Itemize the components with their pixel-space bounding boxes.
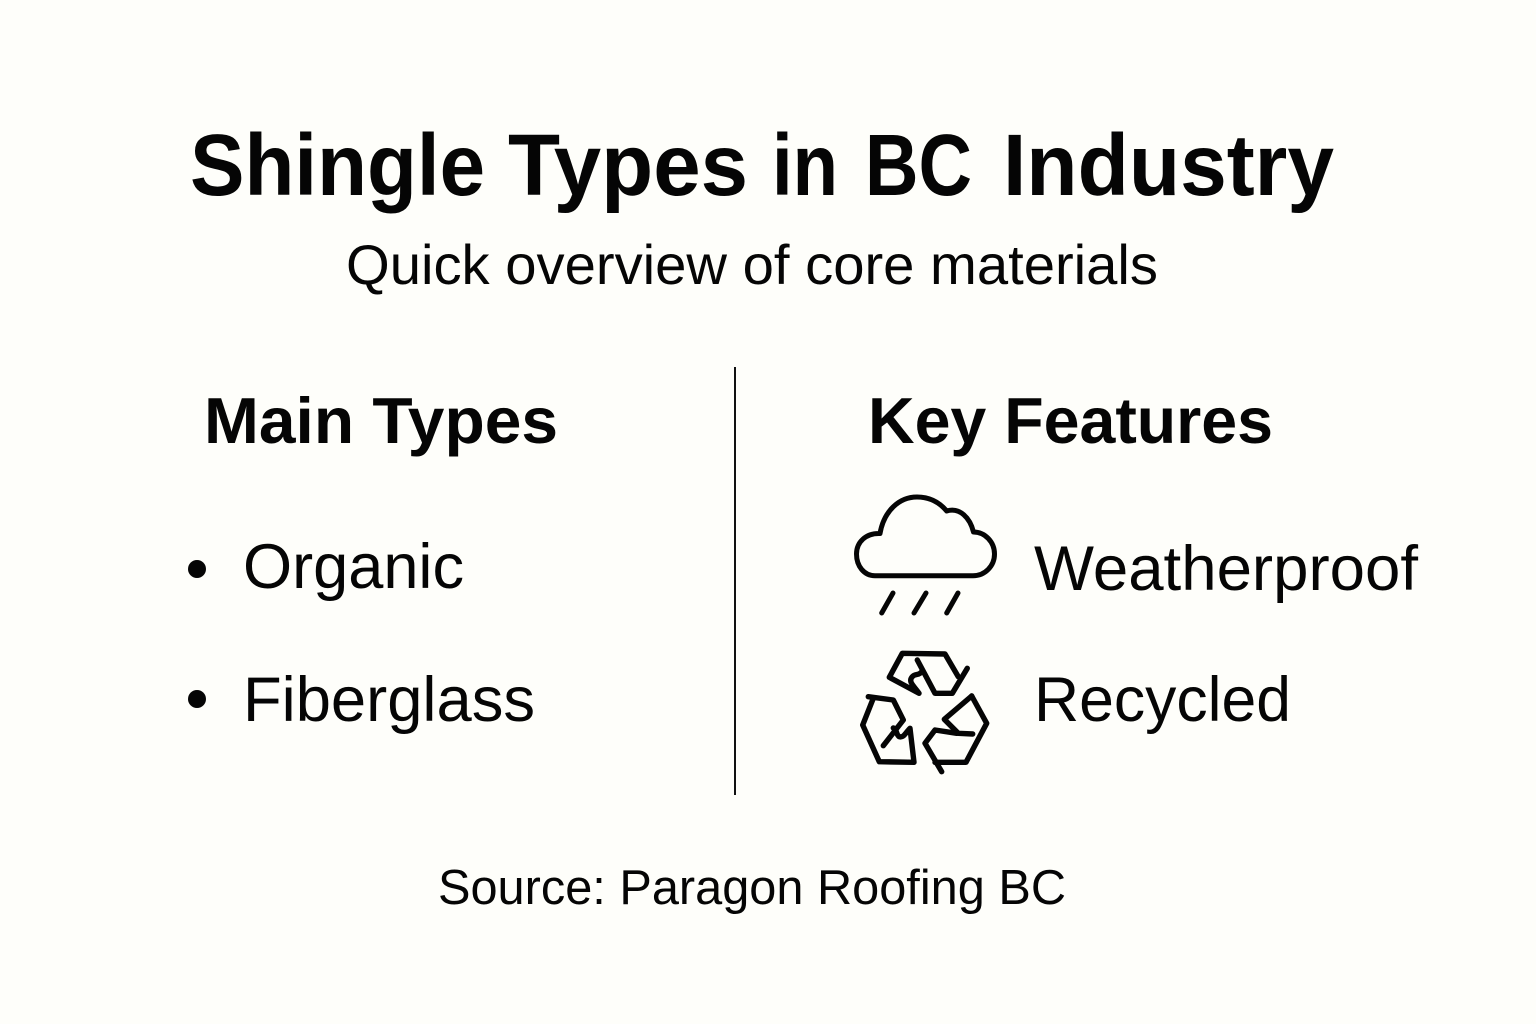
title: [190, 117, 1334, 214]
feature: recycled: Recycled: [1034, 665, 1291, 735]
panel: key features: [856, 384, 1418, 772]
subtitle: Quick overview of core materials: [346, 233, 1158, 296]
title: BC: [865, 117, 972, 214]
feature: recycled: [863, 653, 1291, 772]
title: Shingle: [190, 117, 485, 214]
icon: rain cloud: [856, 497, 994, 613]
panel: main types: [188, 384, 558, 735]
heading: key features: Key Features: [868, 384, 1273, 457]
icon: recycling arrows: [863, 653, 987, 772]
feature: weatherproof: Weatherproof: [1034, 534, 1418, 604]
list item: fiberglass: Fiberglass: [243, 665, 535, 735]
feature: weatherproof: [856, 497, 1418, 613]
heading: main types: Main Types: [204, 384, 558, 457]
list item: organic: Organic: [243, 532, 464, 602]
title: in: [772, 117, 838, 214]
source note: Source: Paragon Roofing BC: [438, 861, 1066, 915]
title: Types: [508, 117, 748, 214]
title: Industry: [1003, 117, 1334, 214]
